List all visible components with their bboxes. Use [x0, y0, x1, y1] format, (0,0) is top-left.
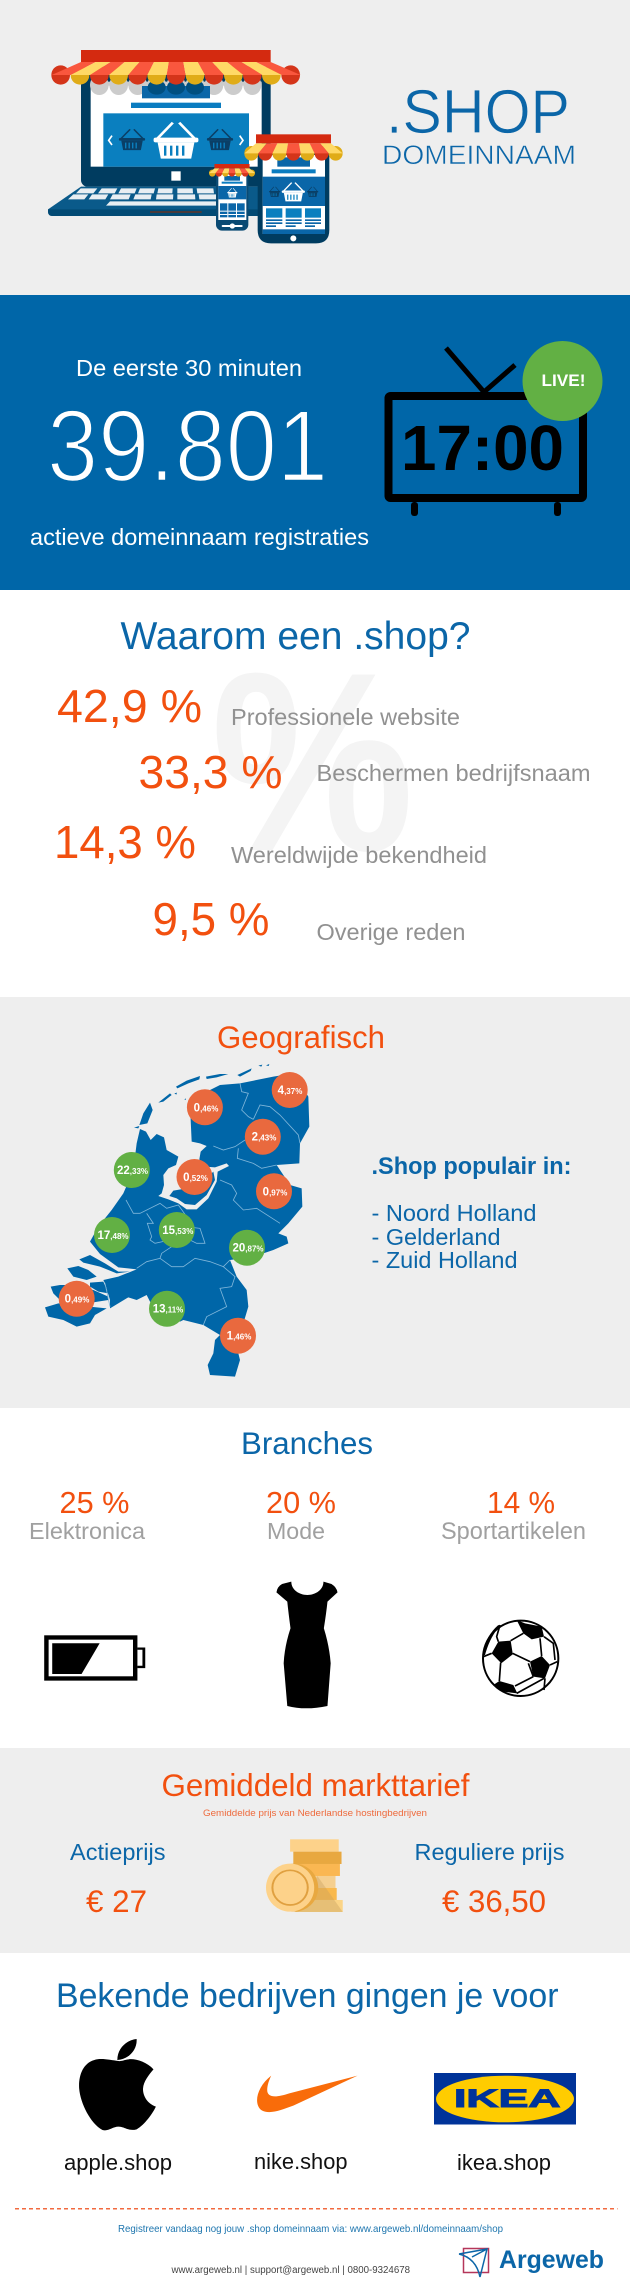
- heading: Bekende bedrijven gingen je voor: [56, 1977, 558, 2015]
- big number: 39.801: [47, 389, 328, 503]
- stat: overige reden: [152, 893, 466, 945]
- marker: 0,46%: [187, 1089, 223, 1125]
- badge: live: [522, 341, 602, 421]
- panel: waarom een .shop: [0, 590, 630, 997]
- marker: 0,49%: 0,49%: [65, 1294, 89, 1306]
- panel: geografisch: [0, 997, 630, 1408]
- marker: 22,33%: [114, 1152, 150, 1188]
- text: clock: 17:00: [401, 412, 564, 484]
- map markers: [59, 1072, 308, 1354]
- icon: television: [388, 348, 583, 516]
- stat: beschermen bedrijfsnaam: 33,3 %: [138, 746, 282, 798]
- logo: ikea: [434, 2073, 576, 2124]
- text: register call to action: Registreer vandaag nog jouw .shop domeinnaam via: www.argeweb.nl/domeinnaam/shop: [118, 2223, 503, 2235]
- panel: bekende bedrijven: [0, 1953, 630, 2290]
- marker: 17,48%: 17,48%: [97, 1230, 129, 1242]
- text: caption: actieve domeinnaam registraties: [30, 524, 369, 550]
- stat: wereldwijde bekendheid: [54, 816, 487, 868]
- marker: 0,46%: 0,46%: [194, 1102, 218, 1114]
- text: intro: De eerste 30 minuten: [76, 355, 302, 381]
- stat: professionele website: 42,9 %: [57, 680, 202, 732]
- heading: Waarom een .shop?: [120, 615, 470, 658]
- icon: battery: [44, 1635, 144, 1681]
- heading: DOMEINNAAM: DOMEINNAAM: [382, 140, 576, 170]
- marker: 22,33%: 22,33%: [117, 1165, 148, 1177]
- logo: nike: [257, 2076, 358, 2112]
- text: populair in: .Shop populair in:: [372, 1153, 572, 1180]
- marker: 4,37%: [272, 1072, 308, 1108]
- text: populair in: - Gelderland: [372, 1224, 500, 1250]
- laptop awning: [81, 50, 271, 62]
- stat: wereldwijde bekendheid: 14,3 %: [54, 816, 196, 868]
- price: reguliere prijs: Reguliere prijs: [414, 1839, 564, 1865]
- stat: overige reden: 9,5 %: [152, 893, 270, 945]
- price: reguliere prijs: € 36,50: [442, 1883, 546, 1919]
- heading: Branches: [241, 1426, 373, 1461]
- text: populair in: - Noord Holland: [372, 1200, 536, 1226]
- panel: registraties: [0, 295, 630, 590]
- stat: overige reden: Overige reden: [316, 919, 466, 945]
- watermark: percent: %: [211, 620, 414, 905]
- marker: 2,43%: 2,43%: [252, 1132, 276, 1144]
- logo: argeweb: [459, 2246, 604, 2277]
- panel: header: [0, 0, 630, 295]
- stat: sportartikelen: [441, 1486, 586, 1545]
- stat: professionele website: Professionele website: [231, 704, 460, 730]
- marker: 0,97%: 0,97%: [263, 1186, 287, 1198]
- marker: 13,11%: 13,11%: [153, 1304, 183, 1316]
- marker: 2,43%: [245, 1119, 281, 1155]
- stat: sportartikelen: Sportartikelen: [441, 1518, 586, 1545]
- marker: 13,11%: [149, 1291, 185, 1327]
- text: populair in: [372, 1153, 572, 1273]
- panel: branches: [0, 1408, 630, 1748]
- text: contact details: www.argeweb.nl | support@argeweb.nl | 0800-9324678: [171, 2265, 410, 2276]
- stat: mode: Mode: [267, 1518, 325, 1544]
- text: populair in: - Zuid Holland: [372, 1247, 518, 1273]
- marker: 0,52%: [176, 1159, 212, 1195]
- label: ikea.shop: ikea.shop: [457, 2150, 551, 2175]
- marker: 0,49%: [59, 1281, 95, 1317]
- stat: professionele website: [57, 680, 460, 732]
- tablet: [258, 153, 329, 243]
- badge: live: LIVE!: [542, 371, 586, 390]
- heading: .SHOP: .SHOP: [386, 78, 570, 147]
- price: actieprijs: € 27: [86, 1883, 147, 1919]
- logo: apple: [79, 2039, 156, 2130]
- stat: mode: 20 %: [266, 1486, 336, 1520]
- stat: elektronica: [29, 1486, 146, 1544]
- price: reguliere prijs: [414, 1839, 564, 1919]
- phone: [216, 172, 248, 231]
- stat: wereldwijde bekendheid: Wereldwijde bekendheid: [231, 842, 487, 868]
- icon: football: [483, 1620, 558, 1696]
- stat: beschermen bedrijfsnaam: [138, 746, 590, 798]
- marker: 1,46%: [220, 1318, 256, 1354]
- illustration: laptop, tablet and phone shop: [48, 50, 343, 243]
- icon: dress: [276, 1582, 338, 1708]
- logo: argeweb: Argeweb: [499, 2246, 604, 2274]
- stat: elektronica: 25 %: [60, 1486, 130, 1520]
- marker: 0,52%: 0,52%: [183, 1172, 208, 1184]
- stat: sportartikelen: 14 %: [487, 1486, 555, 1520]
- stat: elektronica: Elektronica: [29, 1518, 146, 1544]
- heading: Gemiddeld markttarief: [162, 1768, 470, 1803]
- label: nike.shop: nike.shop: [254, 2149, 348, 2174]
- panel: gemiddeld markttarief: [0, 1748, 630, 1953]
- logo: ikea: IKEA: [454, 2085, 560, 2113]
- marker: 15,53%: 15,53%: [162, 1225, 193, 1237]
- price: actieprijs: [70, 1839, 166, 1919]
- marker: 4,37%: 4,37%: [278, 1085, 302, 1097]
- stat: beschermen bedrijfsnaam: Beschermen bedrijfsnaam: [316, 760, 590, 786]
- label: apple.shop: apple.shop: [64, 2150, 172, 2175]
- marker: 17,48%: [94, 1217, 130, 1253]
- heading: Geografisch: [217, 1020, 385, 1055]
- stat: mode: [266, 1486, 336, 1544]
- marker: 1,46%: 1,46%: [227, 1331, 251, 1343]
- marker: 0,97%: [256, 1173, 292, 1209]
- marker: 20,87%: [229, 1230, 265, 1266]
- marker: 15,53%: [159, 1212, 195, 1248]
- price: actieprijs: Actieprijs: [70, 1839, 166, 1865]
- icon: coins: [266, 1839, 343, 1912]
- marker: 20,87%: 20,87%: [232, 1243, 264, 1255]
- map: Netherlands: [45, 1064, 309, 1377]
- subheading: Gemiddelde prijs van Nederlandse hostingbedrijven: [203, 1808, 427, 1819]
